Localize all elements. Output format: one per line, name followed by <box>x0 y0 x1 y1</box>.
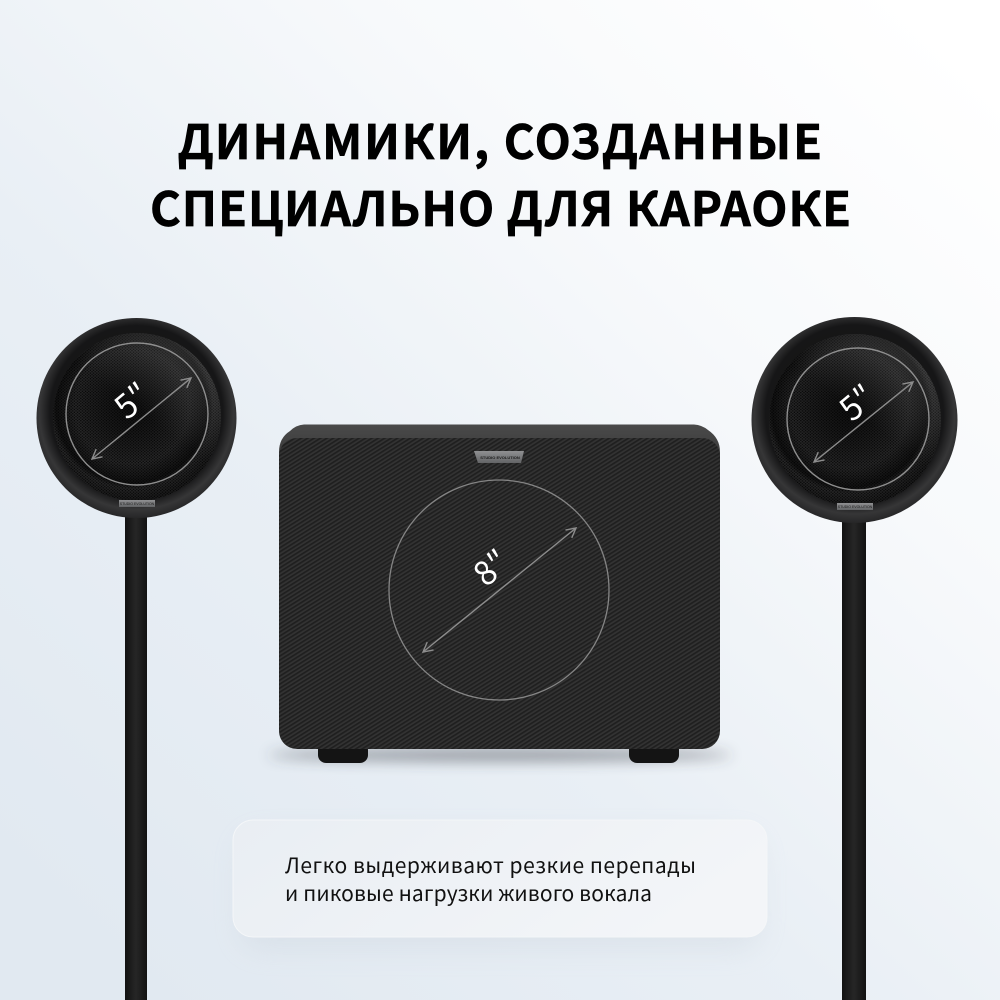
caption card <box>233 820 767 950</box>
left badge: STUDIO EVOLUTION <box>120 502 155 506</box>
title: ДИНАМИКИ, СОЗДАННЫЕ <box>178 104 822 173</box>
card panel <box>233 820 767 937</box>
subwoofer size ring <box>389 480 609 700</box>
subwoofer brand badge <box>474 451 524 463</box>
right badge <box>837 503 873 510</box>
title: СПЕЦИАЛЬНО ДЛЯ КАРАОКЕ <box>150 171 851 240</box>
caption text: и пиковые нагрузки живого вокала <box>285 878 652 908</box>
right size arrow <box>814 382 913 462</box>
right size label: 5″ <box>828 372 884 431</box>
right speaker grille <box>769 334 941 506</box>
caption text: Легко выдерживают резкие перепады <box>285 850 696 880</box>
caption text <box>285 850 696 908</box>
right speaker pole <box>842 515 866 1000</box>
subwoofer floor shadow <box>268 749 732 761</box>
subwoofer <box>268 424 732 763</box>
subwoofer size arrow <box>423 528 576 652</box>
subwoofer feet <box>318 742 679 763</box>
subwoofer brand badge: STUDIO EVOLUTION <box>480 455 520 460</box>
left speaker <box>36 318 236 1000</box>
subwoofer cabinet front <box>279 438 720 749</box>
left speaker grille <box>53 333 221 501</box>
card shadow <box>240 835 760 950</box>
subwoofer size label: 8″ <box>462 537 518 596</box>
right badge: STUDIO EVOLUTION <box>838 505 873 509</box>
title <box>150 104 851 240</box>
left size ring <box>66 343 208 485</box>
right size ring <box>787 348 929 490</box>
right speaker <box>752 317 958 1000</box>
left size arrow <box>92 378 191 459</box>
left badge <box>119 500 155 507</box>
subwoofer cabinet top <box>279 424 720 480</box>
left speaker body <box>36 318 236 518</box>
left size label: 5″ <box>103 370 159 429</box>
right speaker body <box>752 317 958 523</box>
left speaker pole <box>125 510 147 1000</box>
